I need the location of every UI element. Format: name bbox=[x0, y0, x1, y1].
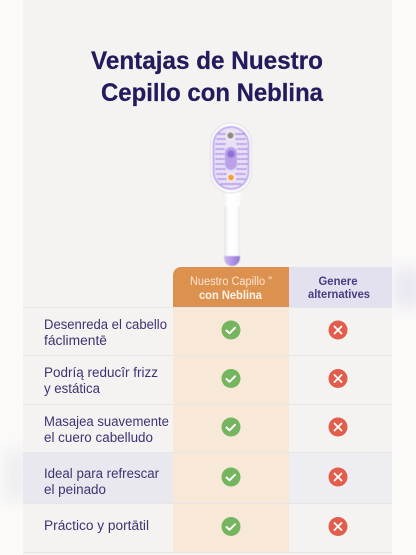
cross icon bbox=[328, 320, 348, 340]
row 2: Podríą reducîr frizz bbox=[44, 365, 158, 380]
row 4 shading bbox=[23, 452, 392, 503]
product image: misting brush bbox=[210, 123, 252, 266]
header cell: Genere alternatives: Genere bbox=[318, 276, 358, 288]
check icon bbox=[222, 517, 240, 536]
row 3 bbox=[44, 414, 348, 445]
header cell: Genere alternatives bbox=[289, 267, 392, 307]
row dividers bbox=[23, 308, 392, 552]
title bbox=[91, 47, 324, 107]
header cell: Nuestro Cepillo con Neblina: Nuestro Capillo " bbox=[190, 276, 272, 288]
check icon bbox=[222, 320, 240, 340]
header cell: Nuestro Cepillo con Neblina bbox=[173, 267, 289, 307]
row 1: Desenreda el cabello bbox=[44, 317, 167, 332]
check icon bbox=[222, 369, 240, 388]
row 4: Ideal para refrescar bbox=[44, 466, 159, 481]
row 5 bbox=[44, 517, 348, 536]
row 3: el cuero cabelludo bbox=[44, 430, 153, 445]
row 4: el peinado bbox=[44, 482, 106, 497]
header cell: Nuestro Cepillo con Neblina: con Neblina bbox=[199, 290, 263, 302]
header cell: Genere alternatives: alternatives bbox=[308, 289, 370, 301]
row 3: Masajea suavemente bbox=[44, 414, 169, 429]
row 2 bbox=[44, 365, 348, 396]
row 1 bbox=[44, 317, 348, 348]
cross icon bbox=[328, 517, 348, 536]
check icon bbox=[222, 468, 240, 486]
row 1: fáclimentē bbox=[44, 333, 107, 348]
table bbox=[23, 267, 392, 552]
cross icon bbox=[328, 418, 348, 436]
cross icon bbox=[328, 369, 348, 388]
side glow bbox=[394, 268, 416, 308]
row 5: Práctico y portātil bbox=[44, 518, 149, 533]
comparison column: Nuestro Cepillo bbox=[173, 307, 289, 552]
title: Cepillo con Neblina bbox=[101, 79, 324, 107]
cross icon bbox=[328, 468, 348, 486]
row 4 bbox=[44, 466, 348, 497]
check icon bbox=[222, 418, 240, 436]
title: Ventajas de Nuestro bbox=[91, 47, 323, 75]
left side glow bbox=[6, 450, 26, 500]
row 2: y estática bbox=[44, 381, 100, 396]
